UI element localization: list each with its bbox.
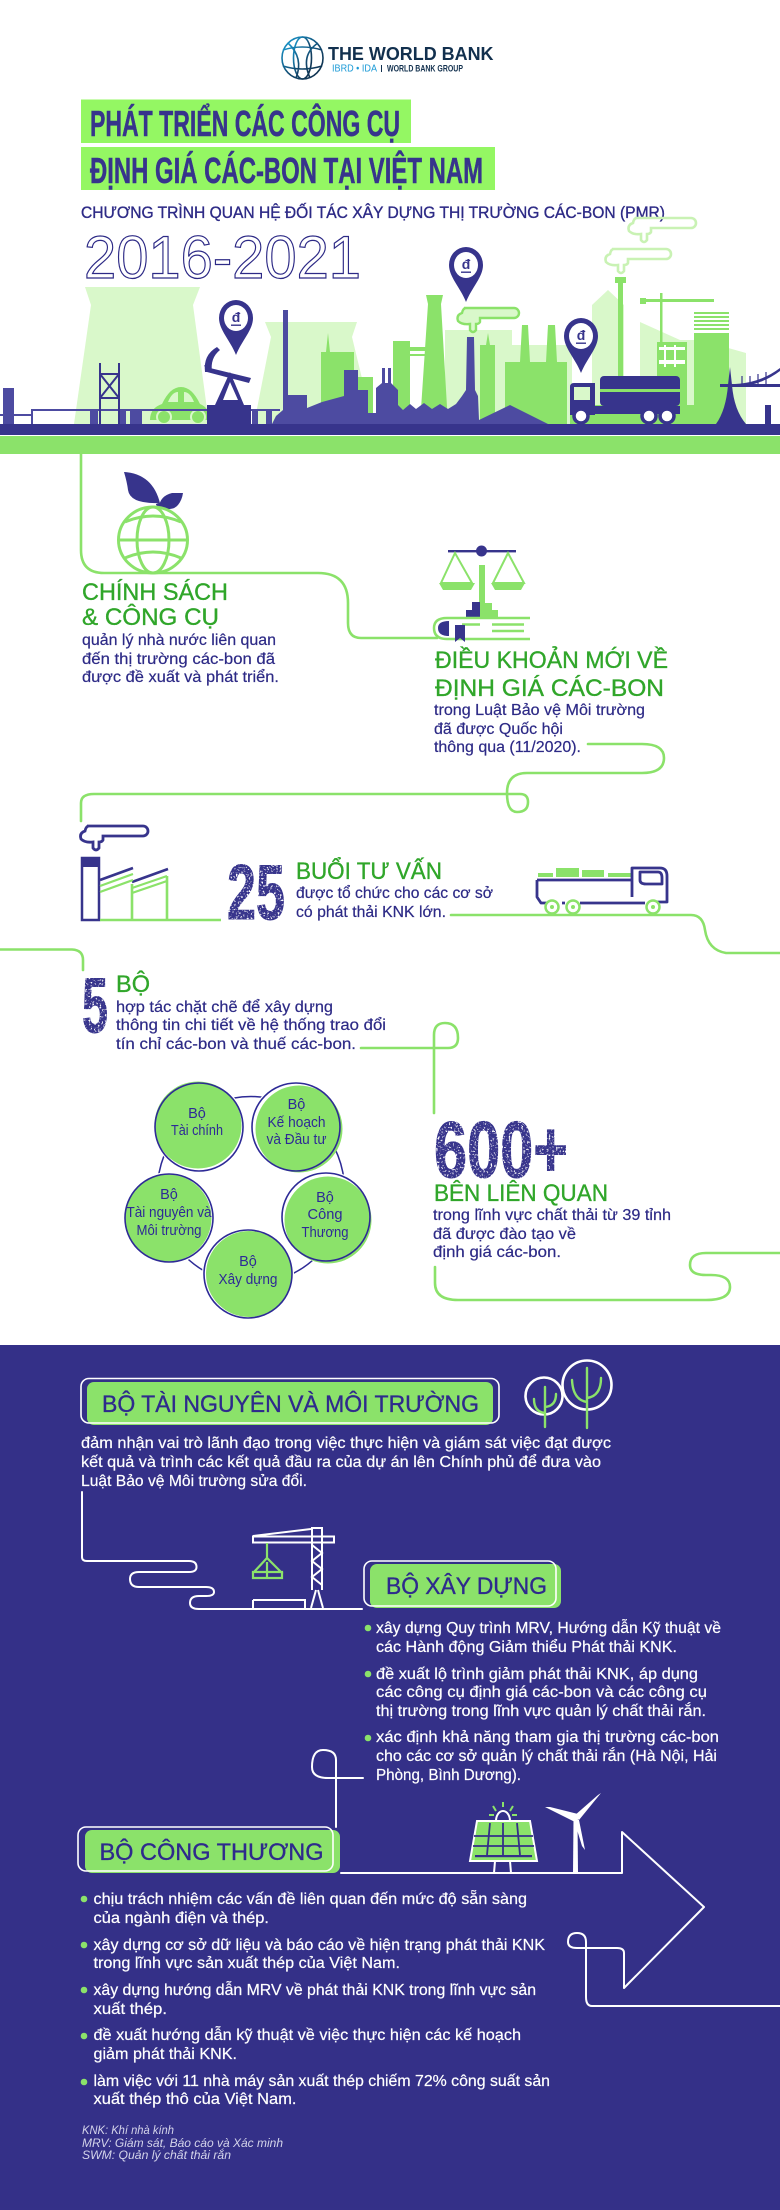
text: 5 bộ: thông tin chi tiết về hệ thống trao đổi (116, 1017, 386, 1034)
circle: Bộ Kế hoạch và Đầu tư: Kế hoạch (268, 1115, 326, 1131)
logo: The World Bank: WORLD BANK GROUP (387, 64, 463, 74)
car (150, 387, 210, 424)
circle: Bộ Công Thương (280, 1171, 372, 1264)
text: điều khoản mới: đã được Quốc hội (434, 721, 563, 738)
text: bên liên quan: trong lĩnh vực chất thải từ 39 tỉnh (433, 1207, 671, 1224)
footnote: abbreviations (82, 2123, 283, 2162)
circle: Bộ Tài chính: Tài chính (171, 1123, 223, 1139)
icon: cargo truck (537, 868, 667, 914)
stat: 600+: 600+ (434, 1105, 568, 1194)
logo: The World Bank (282, 37, 494, 79)
stat: 5: 5 (82, 961, 108, 1049)
text: 5 bộ: hợp tác chặt chẽ để xây dựng (116, 999, 333, 1016)
text: bên liên quan: đã được đào tạo về (433, 1226, 576, 1243)
years: 2016-2021 (84, 224, 361, 291)
lattice tower (100, 363, 119, 424)
circle: Bộ Tài nguyên và Môi trường: Tài nguyên và (126, 1205, 212, 1221)
list: Bộ Xây dựng tasks: các công cụ định giá các-bon và các công cụ (376, 1684, 707, 1701)
circle: Bộ Công Thương: Công (308, 1207, 342, 1223)
list: Bộ Xây dựng tasks: thị trường trong lĩnh vực quản lý chất thải rắn. (376, 1703, 706, 1720)
list: Bộ Công Thương tasks: xuất thép thô của Việt Nam. (94, 2091, 296, 2108)
mid green buildings (321, 277, 729, 424)
heading: Bộ Tài nguyên và Môi trường: BỘ TÀI NGUYÊN VÀ MÔI TRƯỜNG (102, 1390, 479, 1418)
list: Bộ Công Thương tasks: xuất thép. (94, 2001, 167, 2018)
text: chính sách & công cụ: CHÍNH SÁCH (82, 579, 228, 606)
list: Bộ Xây dựng tasks: xây dựng Quy trình MRV, Hướng dẫn Kỹ thuật về (376, 1620, 721, 1637)
text: buổi tư vấn: BUỔI TƯ VẤN (296, 857, 442, 885)
circle: Bộ Xây dựng (202, 1228, 294, 1320)
icon: wind turbine (545, 1793, 601, 1873)
text: điều khoản mới: ĐIỀU KHOẢN MỚI VỀ (435, 645, 668, 674)
icon: price pin 2 (449, 247, 483, 302)
footnote: abbreviations: KNK: Khí nhà kính (82, 2123, 174, 2137)
icon: price pin 3 (564, 318, 598, 373)
circle: Bộ Tài chính (153, 1081, 245, 1173)
list: Bộ Công Thương tasks: giảm phát thải KNK. (94, 2046, 237, 2063)
subtitle: CHƯƠNG TRÌNH QUAN HỆ ĐỐI TÁC XÂY DỰNG THỊ TRƯỜNG CÁC-BON (PMR) (81, 202, 665, 222)
icon: factory (80, 826, 221, 920)
text: chính sách & công cụ (82, 579, 279, 686)
circle: Bộ Kế hoạch và Đầu tư (250, 1081, 342, 1173)
list: Bộ Xây dựng tasks: Phòng, Bình Dương). (376, 1767, 521, 1784)
list: Bộ Công Thương tasks: trong lĩnh vực sản xuất thép của Việt Nam. (94, 1955, 400, 1972)
text: 5 bộ: tín chỉ các-bon và thuế các-bon. (116, 1036, 356, 1053)
title: PHÁT TRIỂN CÁC CÔNG CỤ (90, 102, 400, 144)
text: bên liên quan (433, 1180, 671, 1261)
icon: solar panel (470, 1802, 537, 1873)
icon: price pin 1 (219, 300, 253, 355)
stat: 25: 25 (227, 848, 285, 936)
heading: Bộ Công Thương (78, 1827, 340, 1873)
text: điều khoản mới (434, 645, 668, 756)
text: buổi tư vấn: được tổ chức cho các cơ sở (296, 885, 493, 902)
icon: price pin 3: đ (577, 327, 586, 343)
text: chính sách & công cụ: đến thị trường các-bon đã (82, 651, 275, 668)
icon: crane (253, 1528, 334, 1608)
circle: Bộ Kế hoạch và Đầu tư: và Đầu tư (266, 1132, 327, 1148)
text: buổi tư vấn (296, 857, 493, 921)
text: vai trò Bộ Tài nguyên và Môi trường: Luật Bảo vệ Môi trường sửa đổi. (81, 1473, 307, 1490)
list: Bộ Công Thương tasks: làm việc với 11 nhà máy sản xuất thép chiếm 72% công suất sản (94, 2073, 550, 2090)
circle: Bộ Công Thương: Bộ (316, 1190, 334, 1206)
navy city silhouette (0, 310, 548, 424)
list: Bộ Công Thương tasks (81, 1891, 550, 2108)
logo: The World Bank: THE WORLD BANK (328, 43, 494, 64)
text: điều khoản mới: trong Luật Bảo vệ Môi trường (434, 702, 645, 719)
icon: globe with leaves (118, 472, 188, 573)
list: Bộ Công Thương tasks: xây dựng hướng dẫn MRV về phát thải KNK trong lĩnh vực sản (94, 1982, 536, 1999)
skyline illustration (0, 218, 780, 454)
text: vai trò Bộ Tài nguyên và Môi trường: kết quả và trình các kết quả đầu ra của dự án lên Chính phủ để đưa vào (81, 1454, 601, 1471)
text: chính sách & công cụ: được đề xuất và phát triển. (82, 669, 279, 686)
list: Bộ Công Thương tasks: đề xuất hướng dẫn kỹ thuật về việc thực hiện các kế hoạch (94, 2027, 521, 2044)
text: bên liên quan: định giá các-bon. (433, 1244, 561, 1261)
list: Bộ Xây dựng tasks (365, 1620, 721, 1784)
circle: Bộ Xây dựng: Xây dựng (218, 1272, 278, 1288)
text: 5 bộ (116, 970, 386, 1053)
text: bên liên quan: BÊN LIÊN QUAN (434, 1180, 608, 1207)
list: Bộ Xây dựng tasks: đề xuất lộ trình giảm phát thải KNK, áp dụng (376, 1666, 698, 1683)
icon: globe (282, 37, 323, 79)
text: vai trò Bộ Tài nguyên và Môi trường: đảm nhận vai trò lãnh đạo trong việc thực hiện và giám sát việc đạt được (81, 1435, 611, 1452)
circle: Bộ Tài chính: Bộ (188, 1106, 206, 1122)
circle: Bộ Xây dựng: Bộ (239, 1254, 257, 1270)
circle: Bộ Tài nguyên và Môi trường: Bộ (160, 1187, 178, 1203)
title: ĐỊNH GIÁ CÁC-BON TẠI VIỆT NAM (90, 149, 483, 191)
text: buổi tư vấn: có phát thải KNK lớn. (296, 904, 446, 921)
title (81, 100, 495, 191)
footnote: abbreviations: SWM: Quản lý chất thải rắn (82, 2147, 231, 2162)
circle: Bộ Công Thương: Thương (302, 1225, 348, 1241)
bridge (716, 367, 780, 424)
text: vai trò Bộ Tài nguyên và Môi trường (81, 1435, 611, 1490)
circle: Bộ Tài nguyên và Môi trường (123, 1172, 215, 1264)
text: điều khoản mới: thông qua (11/2020). (434, 739, 581, 756)
text: 5 bộ: BỘ (116, 970, 150, 998)
list: Bộ Công Thương tasks: của ngành điện và thép. (94, 1910, 269, 1927)
circle: Bộ Tài nguyên và Môi trường: Môi trường (136, 1223, 202, 1239)
heading: Bộ Xây dựng: BỘ XÂY DỰNG (386, 1572, 547, 1600)
text: chính sách & công cụ: quản lý nhà nước liên quan (82, 632, 276, 649)
icon: price pin 1: đ (232, 309, 241, 325)
text: chính sách & công cụ: & CÔNG CỤ (82, 603, 219, 631)
list: Bộ Công Thương tasks: chịu trách nhiệm các vấn đề liên quan đến mức độ sẵn sàng (94, 1891, 527, 1908)
list: Bộ Xây dựng tasks: các Hành động Giảm thiểu Phát thải KNK. (376, 1639, 677, 1656)
list: Bộ Công Thương tasks: xây dựng cơ sở dữ liệu và báo cáo về hiện trạng phát thải KNK (94, 1937, 546, 1954)
truck (570, 376, 680, 423)
circle: Bộ Kế hoạch và Đầu tư: Bộ (288, 1097, 305, 1113)
icon: trees (526, 1360, 612, 1428)
diagram: five ministries (123, 1081, 372, 1320)
heading: Bộ Tài nguyên và Môi trường (81, 1378, 499, 1425)
icon: scales and book (434, 546, 530, 642)
smoke outlines (606, 218, 696, 273)
light green background shapes (74, 287, 746, 424)
pumpjack (204, 347, 251, 424)
logo: The World Bank: IBRD • IDA (332, 64, 377, 74)
icon: price pin 2: đ (462, 256, 471, 272)
panel: ministries background (0, 1345, 780, 2210)
text: điều khoản mới: ĐỊNH GIÁ CÁC-BON (435, 675, 664, 702)
heading: Bộ Xây dựng (364, 1561, 561, 1608)
list: Bộ Xây dựng tasks: cho các cơ sở quản lý chất thải rắn (Hà Nội, Hải (376, 1748, 717, 1765)
footnote: abbreviations: MRV: Giám sát, Báo cáo và Xác minh (82, 2136, 283, 2150)
heading: Bộ Công Thương: BỘ CÔNG THƯƠNG (100, 1838, 324, 1866)
list: Bộ Xây dựng tasks: xác định khả năng tham gia thị trường các-bon (376, 1729, 719, 1746)
ground (0, 424, 780, 435)
connector lines, navy section (82, 1492, 780, 2006)
connector lines, white section (0, 454, 780, 1300)
